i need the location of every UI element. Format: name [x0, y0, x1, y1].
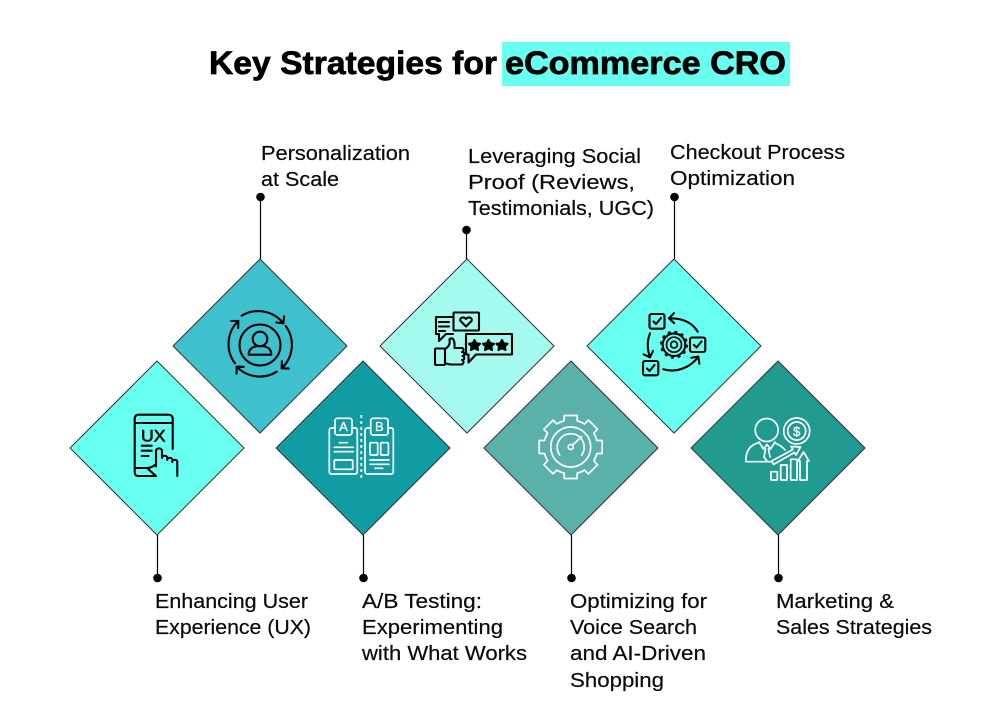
connector [670, 193, 679, 259]
label [155, 591, 311, 639]
label: A/B Testing: [362, 591, 482, 613]
icon: A/B comparison [329, 415, 393, 478]
diamond [587, 259, 761, 433]
connector [567, 535, 576, 582]
label [776, 591, 932, 639]
item: Marketing and Sales Strategies [691, 361, 932, 639]
label: Checkout Process [670, 142, 845, 164]
icon: checklist cycle with gear [643, 314, 705, 375]
title highlight [502, 42, 790, 86]
item: Leveraging Social Proof [380, 146, 654, 433]
label: Experimenting [362, 617, 503, 639]
label: Personalization [261, 143, 410, 165]
icon: person with cycle arrows [229, 311, 292, 377]
diamond [380, 259, 554, 433]
label: at Scale [261, 169, 339, 191]
item: A/B Testing [276, 361, 527, 665]
diamond [70, 361, 244, 535]
connector [256, 193, 265, 259]
label [361, 591, 527, 665]
label [261, 143, 410, 191]
icon: UX phone with pointing hand [135, 415, 177, 476]
label: Voice Search [570, 617, 697, 639]
label [570, 591, 707, 692]
label: and AI-Driven [570, 643, 706, 665]
item: Enhancing User Experience [70, 361, 311, 639]
label: Optimization [670, 168, 795, 190]
label [468, 146, 654, 220]
connector [359, 535, 368, 582]
connector [462, 226, 471, 259]
diamond [173, 259, 347, 433]
diamond [484, 361, 658, 535]
icon: A/B comparison: B [375, 419, 384, 434]
item: Voice Search and AI-Driven Shopping [484, 361, 707, 692]
icon: businessperson with coin and growth chart: $ [793, 424, 801, 439]
label: Shopping [570, 670, 664, 692]
label: Marketing & [776, 591, 895, 613]
icon: speedometer gear [539, 416, 602, 478]
title highlighted text: eCommerce CRO [505, 45, 786, 81]
icon: reviews and thumbs up [435, 312, 512, 365]
icon: businessperson with coin and growth chart [746, 418, 810, 480]
diamond [276, 361, 450, 535]
title [209, 42, 790, 86]
item: Checkout Process Optimization [587, 142, 845, 433]
title text: Key Strategies for [209, 45, 497, 81]
diamond [691, 361, 865, 535]
label: Enhancing User [155, 591, 308, 613]
label: Sales Strategies [776, 617, 932, 639]
item: Personalization at Scale [173, 143, 410, 433]
label: Leveraging Social [468, 146, 641, 168]
connector [153, 535, 162, 582]
label: Experience (UX) [155, 617, 311, 639]
label [670, 142, 845, 190]
label: with What Works [361, 643, 527, 665]
icon: A/B comparison: A [339, 419, 348, 434]
label: Proof (Reviews, [468, 172, 635, 194]
icon: UX phone with pointing hand: UX [141, 427, 166, 446]
label: Testimonials, UGC) [468, 198, 654, 220]
label: Optimizing for [570, 591, 707, 613]
connector [774, 535, 783, 582]
